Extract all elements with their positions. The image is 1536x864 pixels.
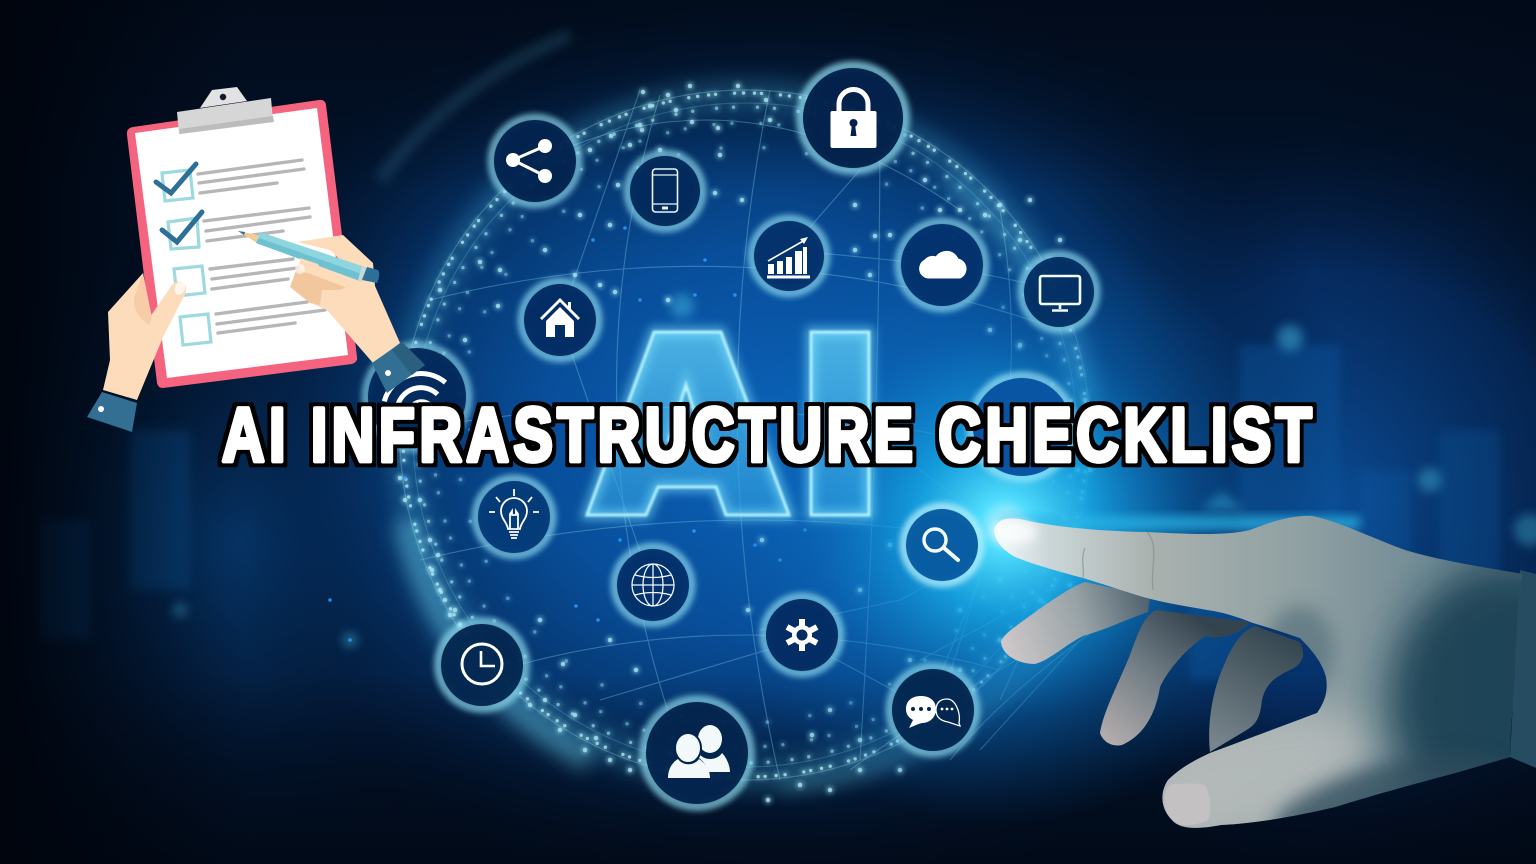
paper sheet [135, 108, 348, 378]
icon: home [522, 282, 598, 358]
middle finger [1001, 582, 1150, 664]
icon: cloud [899, 222, 985, 308]
icon: lightbulb [476, 479, 552, 555]
cuff [1510, 570, 1536, 768]
shadow above thumb crotch [1266, 606, 1334, 694]
left hand [87, 273, 187, 432]
icon: bar chart growth [752, 219, 826, 293]
pinky finger [1209, 626, 1303, 752]
dotted ring bands [403, 93, 1087, 777]
hand: pointing human hand [988, 514, 1536, 828]
checkboxes [162, 170, 211, 345]
icon: clock [439, 622, 525, 708]
checklist lines [198, 160, 325, 333]
right hand with pencil [238, 231, 425, 393]
clipboard clip [177, 87, 274, 134]
icon: chat bubbles [890, 667, 976, 753]
sphere outer glow [380, 35, 1090, 785]
icon: wifi [366, 346, 468, 448]
illustration: clipboard checklist held by hands [87, 87, 425, 432]
clipboard board [127, 100, 357, 388]
check marks [156, 164, 202, 242]
icon: smartphone [628, 154, 702, 228]
title: AI INFRASTRUCTURE CHECKLIST [222, 393, 1312, 478]
wrist shadow [1390, 570, 1536, 830]
pencil [238, 231, 379, 283]
ring finger [1100, 610, 1250, 745]
icon: people [644, 700, 750, 806]
bright lower-left and upper-right band [405, 520, 590, 760]
icon: magnifying glass [904, 507, 980, 583]
globe: dotted network sphere [330, 35, 1240, 800]
icon: monitor [1022, 255, 1096, 329]
icon: globe [615, 547, 691, 623]
icon: share [492, 118, 578, 204]
icon: padlock [801, 66, 905, 170]
icon: plain circle behind title [971, 376, 1073, 478]
mesh lines [410, 90, 1240, 780]
large glowing letters AI [587, 332, 869, 515]
thumbnail [1165, 784, 1210, 825]
palm with index finger and thumb [994, 516, 1522, 828]
blue sparkle nodes [330, 135, 905, 651]
under-hand shadow [1264, 754, 1490, 820]
glow behind fingertip [705, 225, 1360, 825]
knuckle creases [1083, 532, 1154, 590]
scattered network nodes [400, 86, 1090, 800]
fingertip glare [993, 520, 1037, 544]
icon: gear [764, 597, 840, 673]
thumb light area [1162, 694, 1381, 828]
